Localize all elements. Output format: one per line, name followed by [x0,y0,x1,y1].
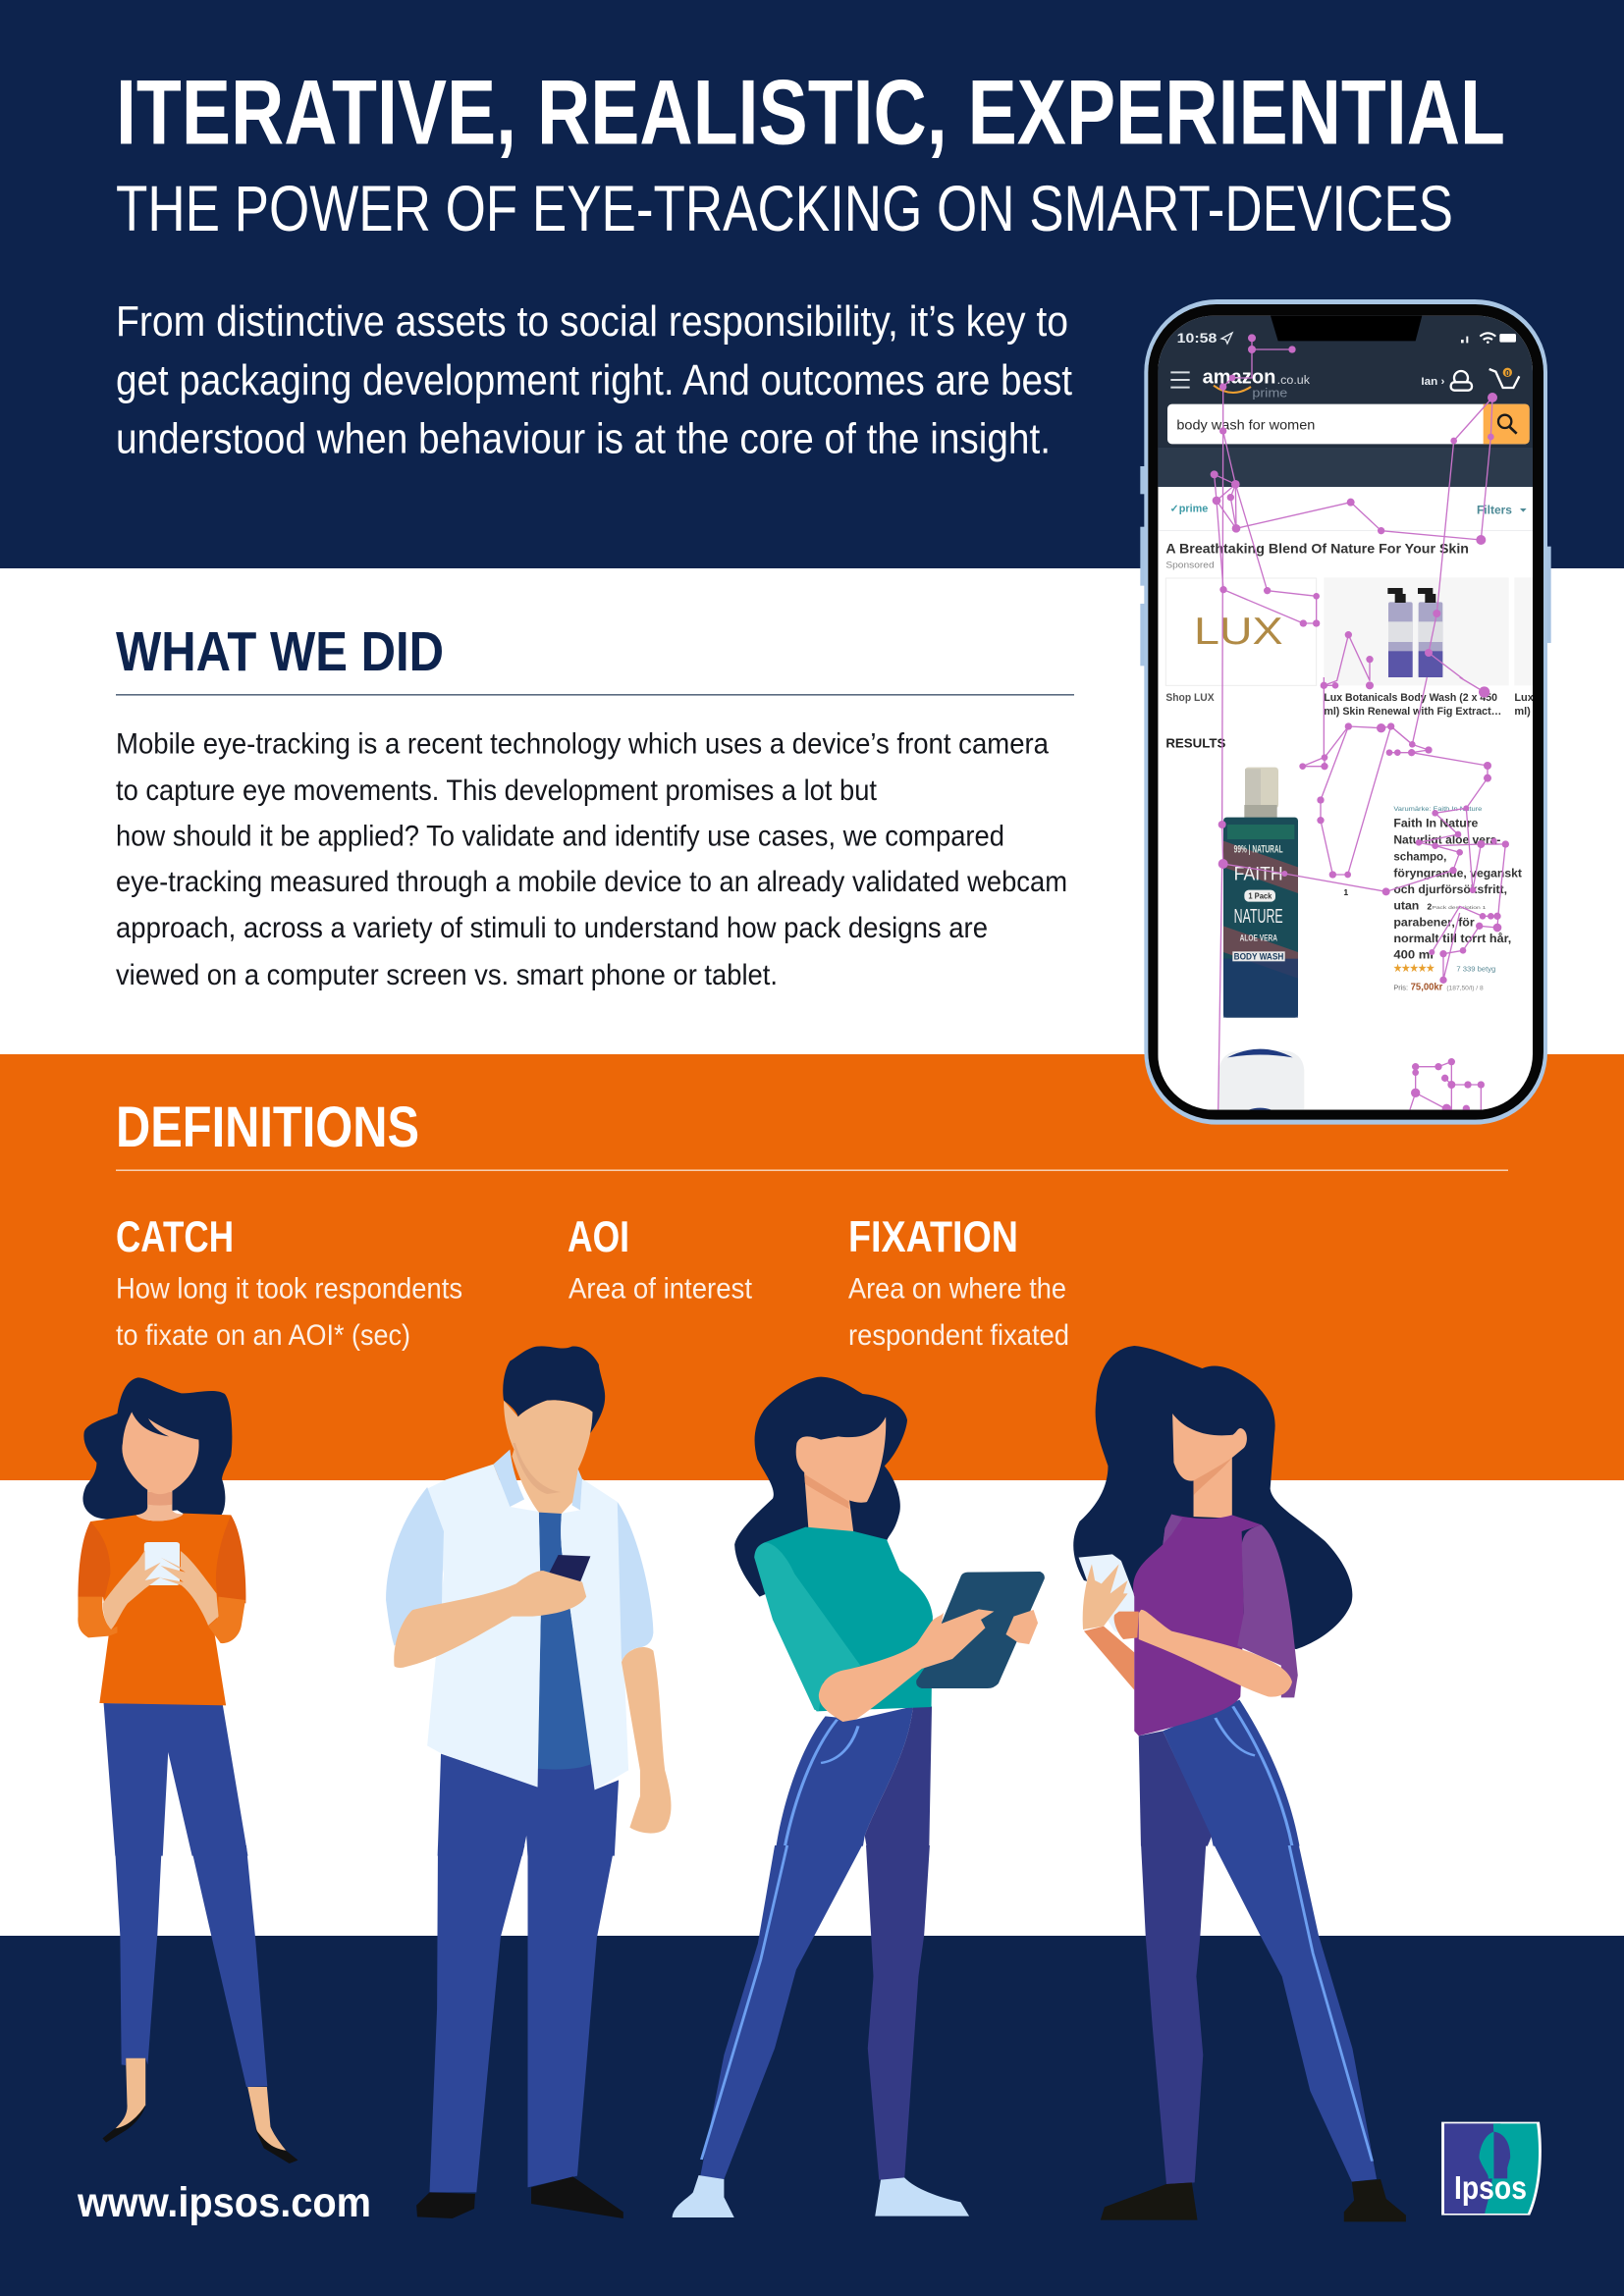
intro paragraph: get packaging development right. And outcomes are best [116,356,1072,404]
product bottle: faith in nature: ALOE VERA [1240,933,1277,942]
product listing text: föryngrande, veganskt [1393,866,1522,880]
hand on phone [1083,1564,1128,1629]
panel: navy header band [0,0,1624,568]
product listing text: schampo, [1393,850,1446,864]
trousers upper [104,1703,247,1856]
app header: prime [1252,387,1287,400]
neck and face [796,1416,886,1534]
results heading: RESULTS [1165,737,1225,751]
sponsored product row: ml) Skin Renewal with Fig Extract… [1324,706,1501,718]
top [764,1527,933,1711]
product listing text: 1 [1343,887,1348,897]
product bottle: faith in nature: 99% | NATURAL [1234,843,1283,855]
person 1: woman in orange top with phone [78,1377,298,2163]
product listing text: utan [1393,899,1419,913]
ipsos logo: Ipsos [1454,2169,1527,2206]
person 4: woman in purple top with phone [1073,1346,1406,2221]
app header [1158,316,1533,487]
filter bar: Filters [1477,503,1512,516]
trousers lower [700,1845,862,2179]
sponsored product row: Shop LUX [1165,692,1215,704]
definition: aoi: AOI [568,1213,629,1261]
product bottle: faith in nature: NATURE [1234,905,1283,928]
definition: fixation [848,1213,1069,1352]
hair [1073,1346,1352,1649]
product bottle: faith in nature [1223,768,1298,1018]
panel: what we did white band [0,568,1624,1054]
sponsored product row: Sponsored [1165,561,1215,570]
text block: what we did: eye-tracking measured through a mobile device to an already validated webcam [116,866,1067,898]
text block: what we did: viewed on a computer screen vs. smart phone or tablet. [116,959,778,991]
definition: aoi [568,1213,752,1306]
phone [144,1542,180,1585]
phone with eye-tracking scan path [1140,299,1551,1125]
person 2: man in white shirt with phone [386,1346,671,2218]
definition: catch: How long it took respondents [116,1272,462,1306]
phone frame [1144,299,1547,1125]
top [90,1514,231,1705]
shoes [416,2192,475,2218]
product listing text: normalt till torrt hår, [1393,932,1511,945]
product listing text [1343,806,1522,992]
sponsored product row: Lux Botanicals Body Wash (2 x 450 [1324,692,1497,704]
ipsos logo [1441,2122,1542,2216]
definition: fixation: Area on where the [848,1272,1066,1306]
hair [503,1346,605,1433]
product listing text: (187,50/l) / 8 [1446,985,1484,991]
text block: what we did: how should it be applied? To validate and identify use cases, we compared [116,821,1004,852]
definition: fixation: FIXATION [848,1213,1018,1261]
neck and face [1172,1414,1247,1519]
eye-tracking scan path [1211,334,1509,1113]
text block: what we did: approach, across a variety of stimuli to understand how pack designs are [116,912,988,944]
trousers lower [115,1845,267,2087]
app header: 0 [1505,368,1510,378]
intro paragraph: understood when behaviour is at the core of the insight. [116,414,1051,463]
sleeves [386,1487,653,1661]
panel: white band behind people [0,1480,1624,1936]
panel: definitions orange band [0,1054,1624,1480]
trousers lower [430,1845,615,2192]
definition: catch: CATCH [116,1213,234,1261]
definition: catch [116,1213,462,1352]
intro paragraph [116,297,1072,463]
product listing text: ★★★★★ [1393,963,1435,974]
hands and arms [103,1550,161,1629]
sponsored product row [1165,540,1535,718]
panel: navy footer band [0,1936,1624,2296]
product bottle: faith in nature: FAITH [1234,865,1283,885]
product listing text: Faith In Nature [1393,817,1478,830]
phone [1079,1554,1139,1639]
sponsored product row: ml) [1514,706,1531,718]
collar [493,1450,582,1510]
arms [394,1571,586,1668]
product listing text: 2 [1427,902,1432,912]
text block: what we did [116,728,1067,991]
definition: fixation: respondent fixated [848,1319,1069,1352]
shoes [673,2175,734,2217]
app header: 10:58 [1177,330,1218,346]
trousers upper [777,1706,913,1846]
hair [82,1377,232,1520]
product listing text: Pris: [1393,983,1408,991]
undershirt [538,1512,593,1770]
phone [545,1555,590,1587]
sponsored product row: LUX [1194,610,1283,653]
product listing text: parabener, för [1393,915,1475,929]
hands and arm [819,1609,994,1722]
heading: definitions: DEFINITIONS [116,1095,419,1159]
heading: what we did: WHAT WE DID [116,620,444,683]
product listing text: 7 339 betyg [1456,964,1495,973]
text block: what we did: Mobile eye-tracking is a recent technology which uses a device’s front camera [116,728,1050,760]
product listing text: 75,00kr [1411,982,1442,992]
product listing text: Naturligt aloe vera- [1393,832,1500,846]
intro paragraph: From distinctive assets to social responsibility, it’s key to [116,297,1068,346]
definition: aoi: Area of interest [568,1272,752,1306]
product listing text: och djurförsöksfritt, [1393,882,1507,896]
neck and face [135,1489,184,1522]
top [1133,1515,1262,1735]
app header: Ian › [1421,376,1445,388]
forearm behind [1084,1627,1134,1690]
trousers lower [1141,1845,1206,2184]
sponsored product row: Lux [1514,692,1535,704]
phone side buttons [1140,466,1551,666]
product bottle: faith in nature: 1 Pack [1248,891,1272,901]
product listing text: Pack description 1 [1432,905,1487,911]
shoes [1101,2182,1198,2220]
next product bottle [1219,1049,1304,1110]
neck and face [504,1400,593,1514]
app header: amazon [1203,365,1275,388]
website url: www.ipsos.com [77,2179,371,2226]
trousers upper [1139,1731,1212,1846]
app header: body wash for women [1176,416,1315,432]
filter bar [1158,503,1533,531]
filter bar: ✓prime [1170,504,1208,515]
tablet [916,1572,1045,1688]
app header: .co.uk [1277,373,1311,387]
sleeves [78,1515,245,1603]
sponsored product row: A Breathtaking Blend Of Nature For Your Skin [1165,540,1469,556]
text block: what we did: to capture eye movements. This development promises a lot but [116,774,877,807]
shoes [102,2105,145,2143]
definition: catch: to fixate on an AOI* (sec) [116,1319,410,1352]
shirt [427,1465,628,1789]
arm [1139,1610,1292,1697]
product listing text: 400 ml [1393,948,1434,962]
phone screen [1158,316,1535,1113]
trousers upper [438,1754,619,1856]
hair [734,1377,907,1597]
person 3: woman in teal top with tablet [673,1377,1045,2217]
feet [114,2058,145,2130]
product listing text: Varumärke: Faith In Nature [1393,806,1483,813]
product bottle: faith in nature: BODY WASH [1234,951,1283,961]
